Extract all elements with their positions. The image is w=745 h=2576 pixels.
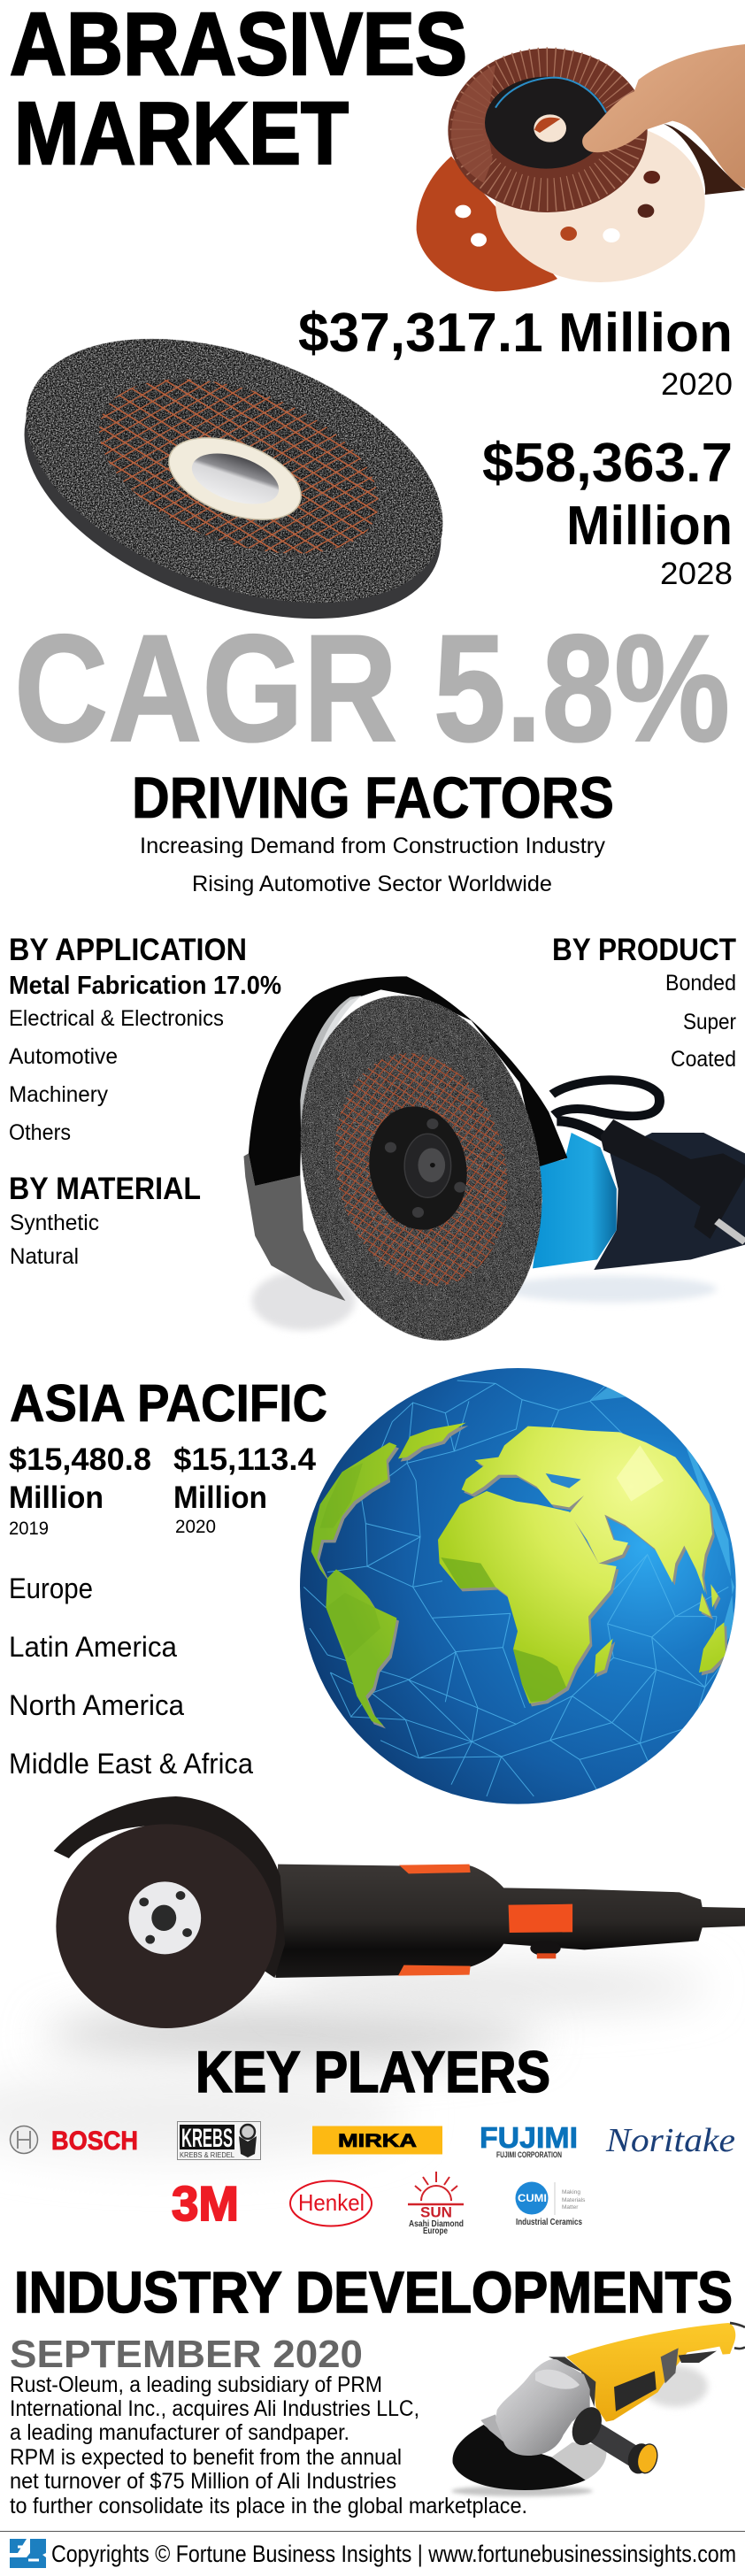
logo: Sun Asahi Diamond Europe: Europe [423, 2226, 448, 2236]
segment: by product: Coated [671, 1047, 736, 1072]
logo: Krebs & Riedel: KREBS & RIEDEL [180, 2151, 235, 2159]
segment: by application: Electrical & Electronics [9, 1006, 224, 1031]
image: flap disc and sanding discs held by hand [417, 44, 745, 291]
development body text: net turnover of $75 Million of Ali Industries [10, 2469, 396, 2494]
development body text: to further consolidate its place in the global marketplace. [10, 2494, 527, 2518]
logo: Sun Asahi Diamond Europe: SUN [420, 2203, 452, 2221]
segment: by material: Synthetic [10, 1211, 99, 1235]
logo: CUMI industrial ceramics [515, 2182, 586, 2227]
development body text: Rust-Oleum, a leading subsidiary of PRM [10, 2372, 382, 2397]
segment: by application [9, 933, 281, 1145]
development body text [10, 2372, 527, 2518]
driving factors: Rising Automotive Sector Worldwide [192, 872, 552, 896]
other regions list: Middle East & Africa [9, 1748, 253, 1780]
other regions list [9, 1573, 253, 1780]
image: yellow angle grinder [451, 2323, 745, 2496]
segment: by application: Machinery [9, 1082, 108, 1107]
region: asia pacific: 2020 [175, 1517, 216, 1537]
logo: Mirka [312, 2126, 442, 2154]
logo: Bosch: BOSCH [51, 2126, 138, 2156]
segment: by application: Automotive [9, 1044, 118, 1069]
region: asia pacific: Million [173, 1480, 267, 1515]
logo: Fujimi: FUJIMI [480, 2121, 578, 2154]
segment: by product [552, 933, 736, 1072]
segment: by material [9, 1172, 201, 1269]
other regions list: Latin America [9, 1631, 177, 1663]
logo: Mirka: MIRKA [338, 2131, 417, 2151]
image: low-poly globe [300, 1368, 736, 1804]
market value 2028: $58,363.7 [482, 433, 733, 494]
other regions list: North America [9, 1689, 184, 1721]
region: asia pacific: 2019 [9, 1519, 49, 1539]
development date: SEPTEMBER 2020 [10, 2333, 363, 2376]
logo: Bosch [11, 2126, 138, 2156]
logo: CUMI industrial ceramics: Making [562, 2189, 580, 2195]
region: asia pacific: $15,113.4 [173, 1442, 317, 1477]
heading: key players: KEY PLAYERS [196, 2039, 550, 2104]
footer [0, 2531, 745, 2568]
driving factors: Increasing Demand from Construction Industry [140, 834, 605, 858]
other regions list: Europe [9, 1573, 93, 1604]
segment: by application: BY APPLICATION [9, 933, 247, 967]
segment: by material: BY MATERIAL [9, 1172, 201, 1206]
market value 2028: Million [566, 496, 733, 557]
segment: by material: Natural [10, 1244, 79, 1269]
logo: Henkel [290, 2180, 372, 2226]
development body text: International Inc., acquires Ali Industries LLC, [10, 2396, 419, 2421]
logo: Fujimi: FUJIMI CORPORATION [496, 2150, 562, 2159]
driving factors [132, 765, 614, 896]
region: asia pacific [9, 1374, 327, 1539]
region: asia pacific: $15,480.8 [9, 1442, 151, 1477]
segment: by application: Metal Fabrication 17.0% [9, 972, 281, 1000]
market value 2020: $37,317.1 Million [298, 303, 733, 364]
region: asia pacific: ASIA PACIFIC [10, 1374, 327, 1433]
market value 2028 [482, 433, 733, 591]
image: angle grinder with blue body [243, 976, 745, 1358]
logo: CUMI industrial ceramics: Industrial Ceramics [516, 2218, 582, 2227]
segment: by application: Others [9, 1120, 71, 1145]
logo: Sun Asahi Diamond Europe: Asahi Diamond [409, 2219, 464, 2229]
logo: CUMI industrial ceramics: Materials [562, 2197, 586, 2203]
logo: Henkel: Henkel [298, 2189, 365, 2216]
image: depressed centre grinding disc [0, 288, 479, 670]
title: MARKET [14, 84, 349, 183]
logo: Noritake: Noritake [605, 2122, 735, 2159]
market value 2028: 2028 [660, 557, 733, 591]
title [10, 0, 467, 183]
market value 2020: 2020 [661, 367, 733, 402]
logo: CUMI industrial ceramics: Matter [562, 2204, 579, 2211]
market value 2020 [298, 303, 733, 402]
development body text: a leading manufacturer of sandpaper. [10, 2420, 349, 2445]
driving factors: DRIVING FACTORS [132, 765, 614, 830]
logo: 3M: 3M [172, 2176, 239, 2231]
region: asia pacific: Million [9, 1480, 104, 1515]
image: black angle grinder with orange switch [0, 1796, 745, 2159]
logo: Krebs & Riedel [177, 2122, 260, 2159]
logo: Krebs & Riedel: KREBS [181, 2124, 233, 2153]
development body text: RPM is expected to benefit from the annual [10, 2445, 402, 2470]
segment: by product: Super [683, 1010, 736, 1034]
logo: Sun Asahi Diamond Europe [408, 2172, 464, 2236]
logo: CUMI industrial ceramics: CUMI [518, 2192, 547, 2204]
segment: by product: Bonded [665, 971, 736, 996]
